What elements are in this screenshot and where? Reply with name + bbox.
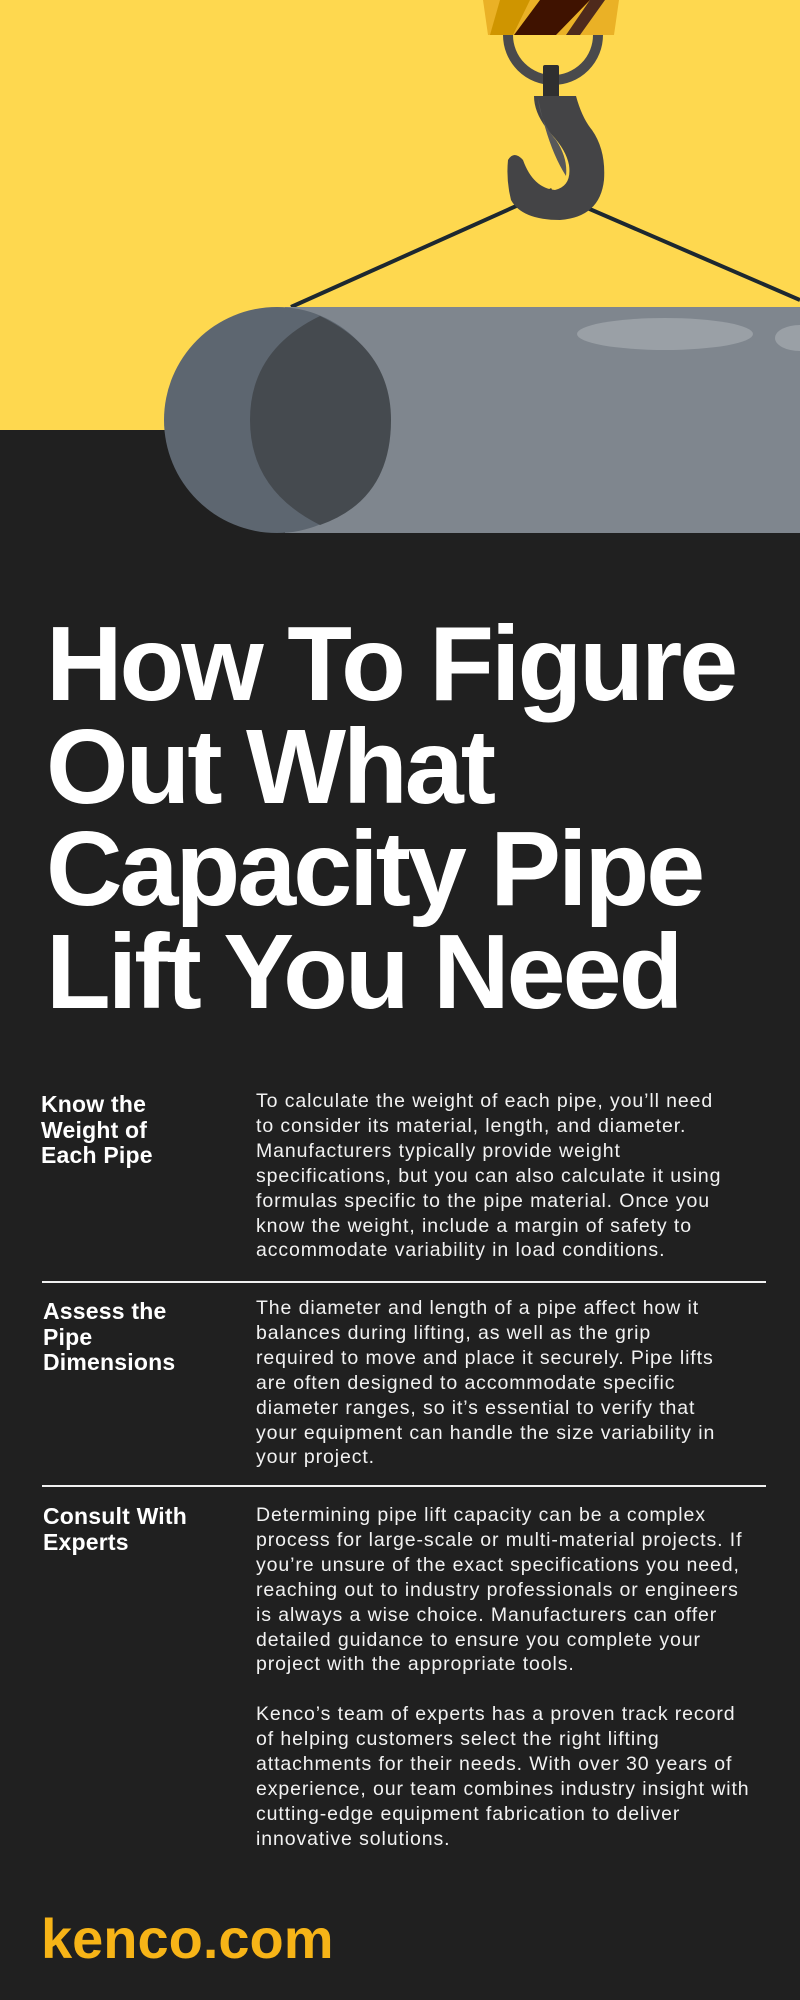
- section 3 text: experience, our team combines industry insight with: [256, 1778, 750, 1800]
- section 2 text: required to move and place it securely. Pipe lifts: [256, 1347, 714, 1369]
- section 3 heading: Consult With: [43, 1503, 187, 1529]
- title: Out What: [46, 708, 493, 826]
- section 3 text: detailed guidance to ensure you complete your: [256, 1629, 701, 1651]
- section 3 text: innovative solutions.: [256, 1828, 451, 1850]
- icon: crane block: [483, 0, 619, 35]
- title: How To Figure: [46, 605, 735, 723]
- section 1 text: [256, 1090, 721, 1261]
- icon: pipe: [164, 307, 800, 533]
- icon: ropes: [291, 190, 800, 307]
- section 3 text: process for large-scale or multi-material projects. If: [256, 1529, 742, 1551]
- section 2 text: balances during lifting, as well as the grip: [256, 1322, 651, 1344]
- section 2 text: diameter ranges, so it’s essential to verify that: [256, 1397, 695, 1419]
- section 2 heading: Pipe: [43, 1324, 92, 1350]
- section 2 heading: Dimensions: [43, 1349, 175, 1375]
- title: Lift You Need: [46, 912, 680, 1030]
- section 2 text: The diameter and length of a pipe affect how it: [256, 1297, 699, 1319]
- section 1 heading: Weight of: [41, 1116, 147, 1142]
- section 3 text: attachments for their needs. With over 30 years of: [256, 1753, 732, 1775]
- section 3 text: Determining pipe lift capacity can be a complex: [256, 1504, 706, 1526]
- section 3 text: is always a wise choice. Manufacturers can offer: [256, 1604, 717, 1626]
- section 3 text: you’re unsure of the exact specifications you need,: [256, 1554, 740, 1576]
- section 3 heading: Experts: [43, 1528, 129, 1554]
- section 2 text: are often designed to accommodate specific: [256, 1372, 675, 1394]
- section 3 text: Kenco’s team of experts has a proven track record: [256, 1703, 735, 1725]
- title: [46, 605, 735, 1030]
- section 1 heading: Know the: [41, 1091, 146, 1117]
- section 3 text: reaching out to industry professionals or engineers: [256, 1579, 739, 1601]
- section 1 heading: Each Pipe: [41, 1142, 153, 1168]
- section 2 heading: Assess the: [43, 1298, 166, 1324]
- section 1 text: To calculate the weight of each pipe, you’ll need: [256, 1090, 713, 1112]
- hero illustration: [0, 0, 800, 533]
- section 2 heading: [43, 1298, 175, 1375]
- section 1 text: Manufacturers typically provide weight: [256, 1140, 621, 1162]
- section 1 heading: [41, 1091, 153, 1168]
- section 3 text: cutting-edge equipment fabrication to deliver: [256, 1803, 680, 1825]
- icon: hook: [507, 35, 604, 220]
- section 1 text: specifications, but you can also calculate it using: [256, 1165, 721, 1187]
- section 2 text: [256, 1297, 715, 1468]
- section 1 text: formulas specific to the pipe material. Once you: [256, 1190, 710, 1212]
- section 3 text: project with the appropriate tools.: [256, 1653, 575, 1675]
- section 2 text: your project.: [256, 1446, 375, 1468]
- footer: kenco.com: kenco.com: [41, 1907, 334, 1970]
- section 3 text: of helping customers select the right lifting: [256, 1728, 660, 1750]
- section 1 text: to consider its material, length, and diameter.: [256, 1115, 686, 1137]
- section 3 heading: [43, 1503, 187, 1555]
- section 1 text: know the weight, include a margin of safety to: [256, 1215, 692, 1237]
- section 1 text: accommodate variability in load conditions.: [256, 1239, 665, 1261]
- section 3 text: [256, 1504, 750, 1850]
- title: Capacity Pipe: [46, 810, 702, 928]
- section 2 text: your equipment can handle the size variability in: [256, 1422, 715, 1444]
